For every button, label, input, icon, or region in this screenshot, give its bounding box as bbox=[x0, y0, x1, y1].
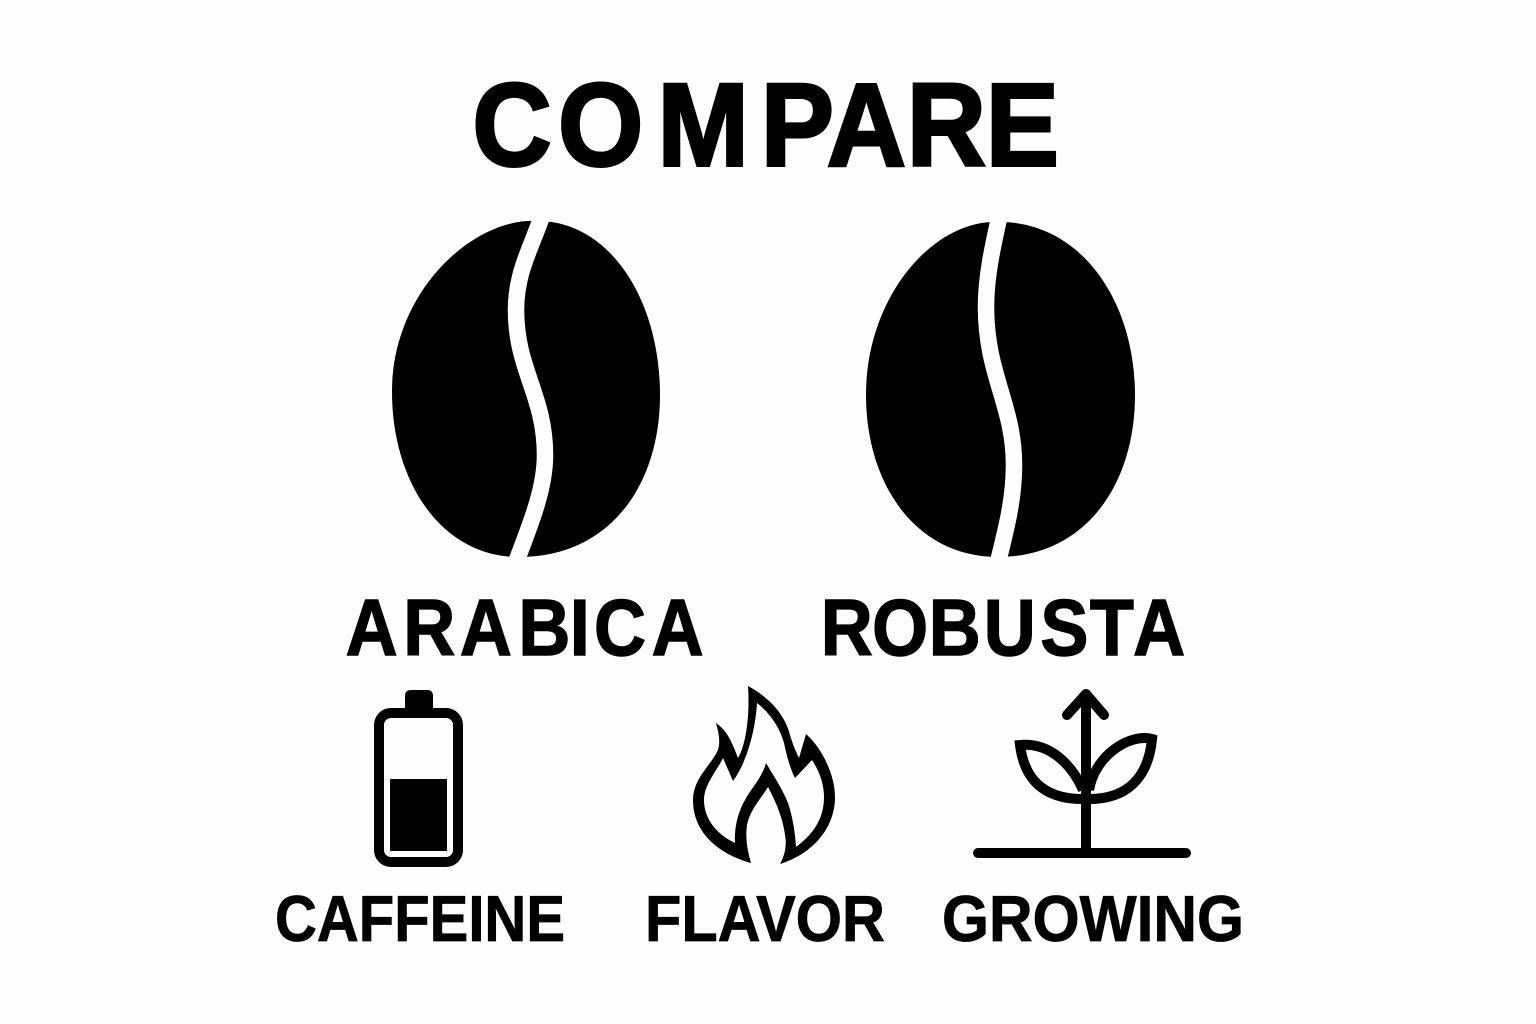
icon: arabica coffee bean bbox=[392, 210, 660, 565]
icon: growing plant bbox=[978, 694, 1186, 853]
label: flavor: FLAVOR bbox=[645, 882, 885, 955]
label: arabica: ARABICA bbox=[346, 584, 704, 673]
icon: battery bbox=[379, 690, 458, 862]
label: growing: GROWING bbox=[942, 882, 1244, 955]
title: COMPARE bbox=[472, 60, 1059, 191]
label: robusta: ROBUSTA bbox=[821, 584, 1185, 673]
icon: flame bbox=[693, 686, 835, 864]
icon: robusta coffee bean bbox=[866, 205, 1135, 570]
label: caffeine: CAFFEINE bbox=[275, 882, 565, 955]
